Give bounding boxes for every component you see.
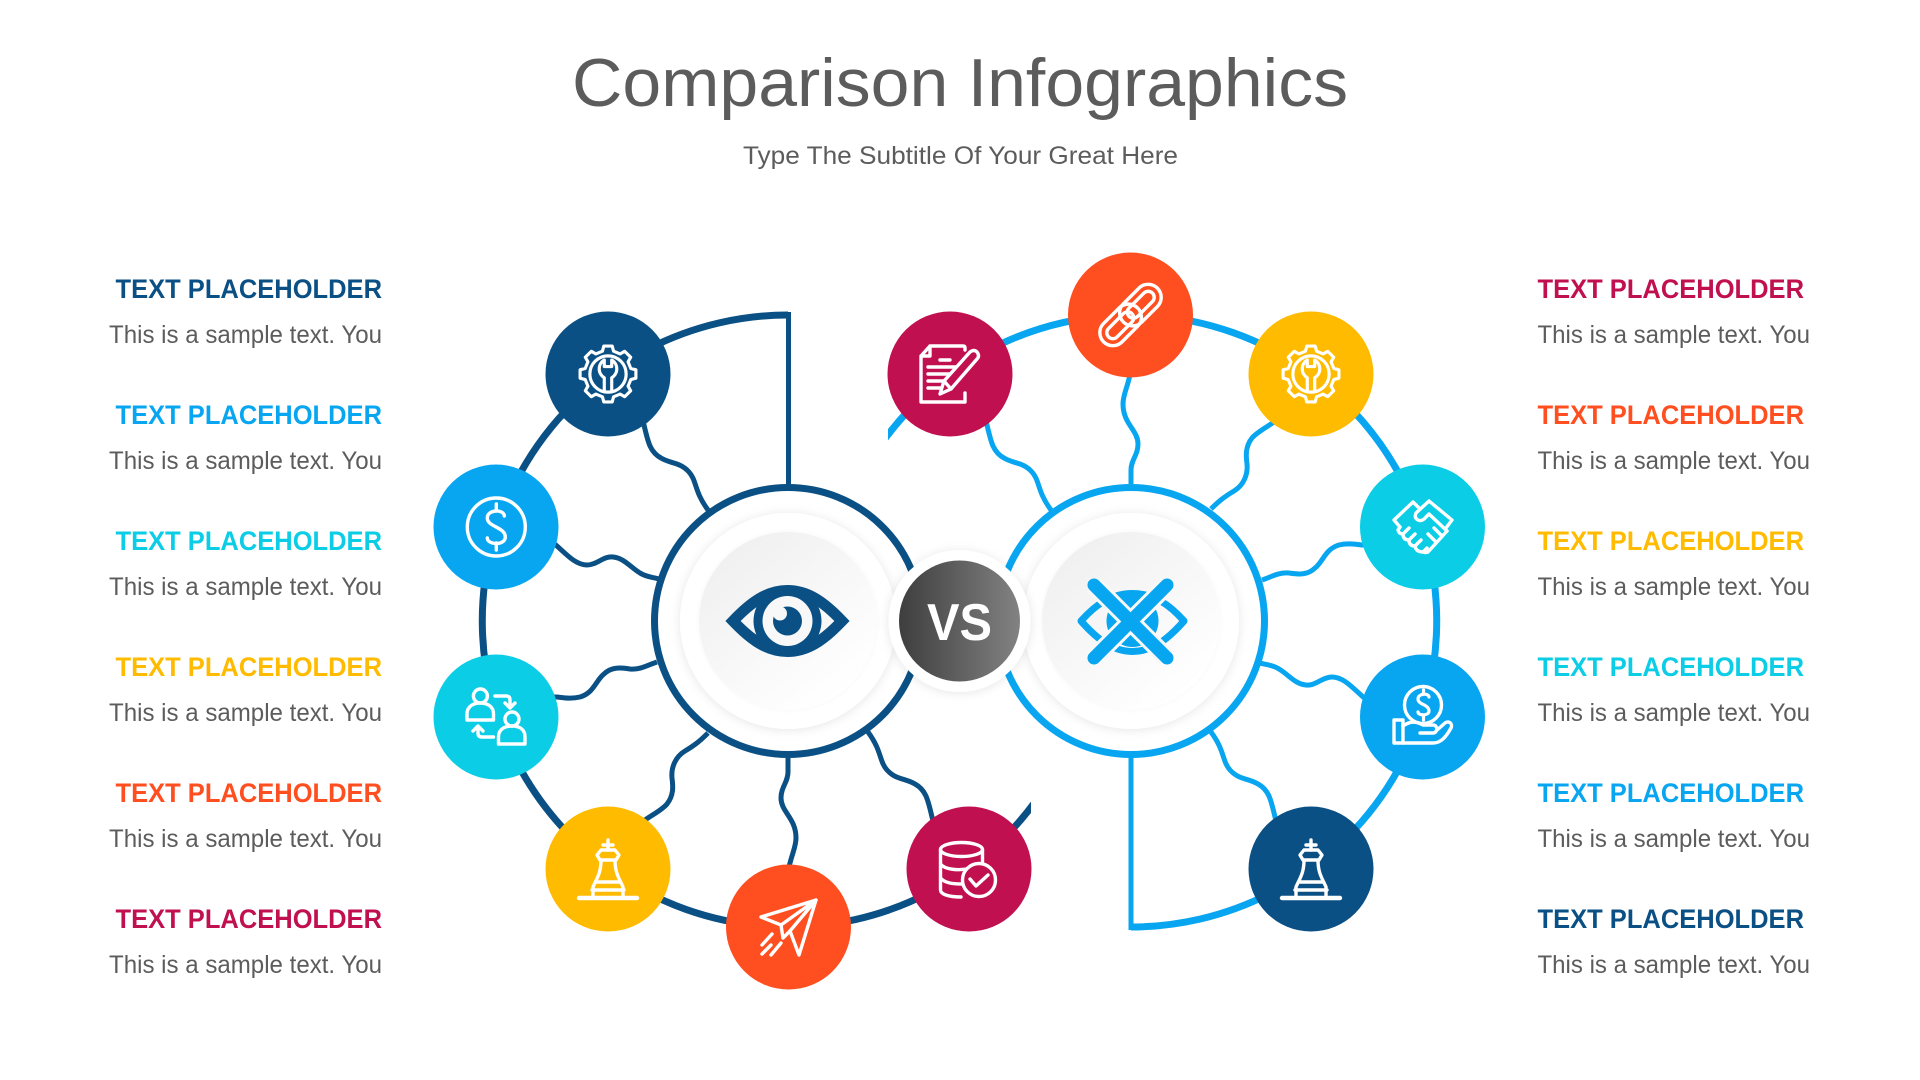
node: magenta document [888,312,1012,436]
right wavy connectors [984,370,1371,828]
panel: left text list [109,274,382,979]
left item 2: TEXT PLACEHOLDER [116,400,382,430]
left item 2 [109,400,382,475]
icon: crossed eye [1081,585,1184,658]
left item 6: This is a sample text. You [109,951,382,979]
left item 5: This is a sample text. You [109,825,382,853]
right item 4: This is a sample text. You [1538,699,1810,727]
left item 6: TEXT PLACEHOLDER [116,904,382,934]
right item 1 [1538,274,1810,349]
subtitle: Type The Subtitle Of Your Great Here [743,142,1178,170]
icon: hand holding coin [1394,686,1452,743]
left item 1 [109,274,382,349]
icon: dollar coin [467,498,525,556]
right item 3 [1538,526,1810,601]
left item 5 [109,778,382,853]
left outer arc with vertical spoke [482,312,1040,927]
left item 4: TEXT PLACEHOLDER [116,652,382,682]
VS badge: VS [927,594,992,652]
icon: chain link [1094,279,1167,351]
icon: gear wrench [580,346,636,402]
left item 2: This is a sample text. You [109,447,382,475]
left item 1: TEXT PLACEHOLDER [116,274,382,304]
left item 4: This is a sample text. You [109,699,382,727]
left item 6 [109,904,382,979]
VS badge [888,550,1030,692]
node: yellow chess [546,806,670,932]
left central hub [654,488,922,754]
right item 5 [1538,778,1810,853]
left item 4 [109,652,382,727]
node: yellow gear [1248,312,1374,436]
right item 1: This is a sample text. You [1538,321,1810,349]
left item 1: This is a sample text. You [109,321,382,349]
icon: database check [940,842,996,897]
node: cyan handshake [1360,464,1485,590]
icon: people exchange [467,689,525,744]
node: blue hand with coin [1360,654,1485,780]
right item 2 [1538,400,1810,475]
right item 3: This is a sample text. You [1538,573,1810,601]
title: Comparison Infographics [572,45,1348,121]
right item 3: TEXT PLACEHOLDER [1538,526,1804,556]
left wavy connectors [548,414,935,872]
right item 6 [1538,904,1810,979]
icon: chess king [1282,840,1340,898]
left item 3: This is a sample text. You [109,573,382,601]
node: cyan people exchange [434,654,558,780]
node: navy gear [546,312,670,436]
right item 6: TEXT PLACEHOLDER [1538,904,1804,934]
icon: gear wrench [1283,346,1339,402]
left item 3: TEXT PLACEHOLDER [116,526,382,556]
right item 2: TEXT PLACEHOLDER [1538,400,1804,430]
right outer arc with vertical spoke [879,315,1437,930]
panel: right text list [1538,274,1810,979]
node: orange chain link [1068,252,1193,378]
right item 1: TEXT PLACEHOLDER [1538,274,1804,304]
left item 5: TEXT PLACEHOLDER [116,778,382,808]
icon: chess king [579,840,637,898]
right item 5: This is a sample text. You [1538,825,1810,853]
node: orange paper plane [726,864,851,990]
icon: eye [733,587,842,655]
left item 3 [109,526,382,601]
node: navy chess [1248,806,1374,932]
right item 4 [1538,652,1810,727]
icon: handshake [1394,501,1452,552]
icon: document and pencil [921,346,978,402]
right item 6: This is a sample text. You [1538,951,1810,979]
right item 4: TEXT PLACEHOLDER [1538,652,1804,682]
icon: paper plane [761,900,816,955]
right central hub [998,488,1264,754]
right item 5: TEXT PLACEHOLDER [1538,778,1804,808]
node: magenta database [906,806,1032,932]
node: blue dollar [434,464,558,590]
right item 2: This is a sample text. You [1538,447,1810,475]
